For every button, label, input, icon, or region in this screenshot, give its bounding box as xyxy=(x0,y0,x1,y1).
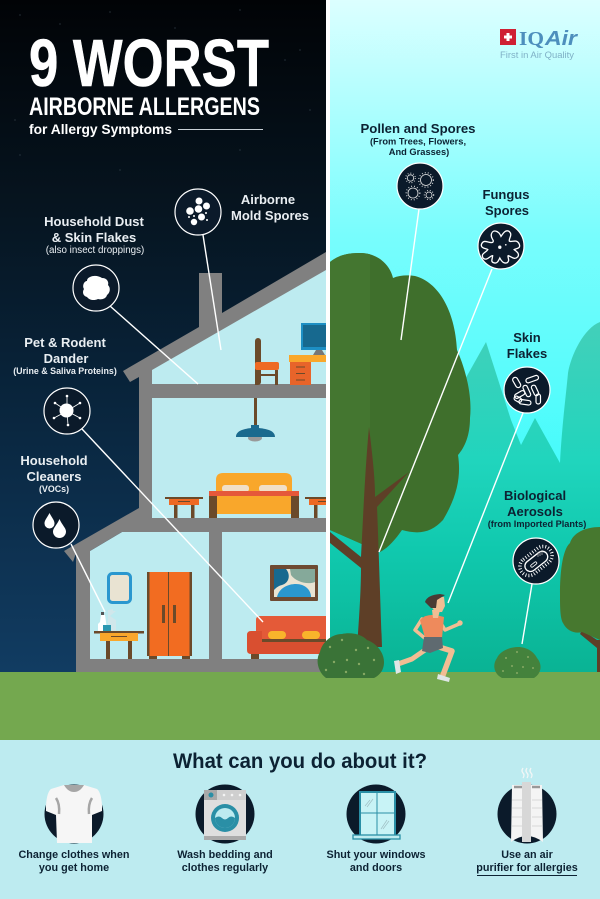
logo: IQAir: Air xyxy=(544,28,578,50)
action: air purifier: Use an air xyxy=(501,849,554,861)
label: household dust: Household Dust xyxy=(44,214,144,229)
icon: drops xyxy=(33,502,79,548)
right tree background xyxy=(560,527,600,672)
action: change clothes xyxy=(18,784,130,874)
action: change clothes: you get home xyxy=(39,862,109,874)
runner xyxy=(394,594,463,682)
furniture: wardrobe xyxy=(147,572,192,659)
furniture: side table with cleaners xyxy=(94,609,144,659)
label: biological aerosols: Aerosols xyxy=(507,504,563,519)
label: household cleaners: (VOCs) xyxy=(39,484,69,494)
title xyxy=(29,26,269,137)
leader lines xyxy=(71,209,532,644)
big tree xyxy=(330,253,470,647)
action: shut windows: and doors xyxy=(350,862,402,874)
label: pet and rodent dander: (Urine & Saliva Proteins) xyxy=(13,366,117,376)
furniture: sofa xyxy=(247,616,326,659)
label: airborne mold spores xyxy=(231,192,309,223)
label: fungus spores: Fungus xyxy=(483,187,529,202)
panel: outdoor day sky xyxy=(330,0,600,672)
furniture: painting xyxy=(270,565,318,601)
label: skin flakes xyxy=(507,330,547,361)
action: wash bedding: clothes regularly xyxy=(182,862,268,874)
label: pet and rodent dander: Dander xyxy=(44,351,88,366)
label: household cleaners: Cleaners xyxy=(27,469,81,484)
label: household cleaners: Household xyxy=(20,453,88,468)
title: AIRBORNE ALLERGENS xyxy=(29,93,260,121)
icon: dust xyxy=(73,265,119,311)
logo: IQAir: IQ xyxy=(519,28,544,50)
icon: pollen xyxy=(397,163,443,209)
label: biological aerosols: Biological xyxy=(504,488,566,503)
label: biological aerosols: (from Imported Plants) xyxy=(488,519,586,529)
label: biological aerosols xyxy=(488,488,586,529)
furniture: ceiling lamp xyxy=(236,398,275,442)
label: skin flakes: Skin xyxy=(513,330,541,345)
action: air purifier: purifier for allergies xyxy=(476,862,578,874)
label: pet and rodent dander: Pet & Rodent xyxy=(24,335,106,350)
action: air purifier xyxy=(476,768,578,876)
label: household dust xyxy=(44,214,144,256)
furniture: mirror xyxy=(108,574,130,602)
icon: dander xyxy=(44,388,90,434)
label: pollen and spores: Pollen and Spores xyxy=(360,121,476,136)
bush small xyxy=(494,647,541,678)
action: change clothes: Change clothes when xyxy=(18,849,130,861)
title: for Allergy Symptoms xyxy=(29,122,172,137)
furniture: chair xyxy=(255,338,279,385)
furniture: night tables xyxy=(165,497,326,518)
icon: mold spores xyxy=(175,189,221,235)
logo: IQAir: First in Air Quality xyxy=(500,50,574,61)
panel: what can you do xyxy=(0,740,600,899)
label: fungus spores xyxy=(483,187,529,218)
logo: IQAir xyxy=(500,28,578,61)
label: fungus spores: Spores xyxy=(485,203,529,218)
action: shut windows xyxy=(327,784,425,874)
ground xyxy=(0,672,600,740)
furniture: bed xyxy=(209,473,299,518)
bush large xyxy=(318,633,384,678)
label: skin flakes: Flakes xyxy=(507,346,547,361)
label: pet and rodent dander xyxy=(13,335,117,376)
icon: fungus xyxy=(478,223,524,269)
furniture: desk and monitor xyxy=(289,323,326,385)
label: household dust: (also insect droppings) xyxy=(46,245,144,256)
label: household cleaners xyxy=(20,453,88,494)
action: wash bedding: Wash bedding and xyxy=(177,849,273,861)
panel: indoor night sky xyxy=(0,0,326,672)
label: pollen and spores xyxy=(360,121,476,157)
action: shut windows: Shut your windows xyxy=(327,849,425,861)
label: pollen and spores: (From Trees, Flowers, xyxy=(370,136,466,146)
label: airborne mold spores: Mold Spores xyxy=(231,208,309,223)
action: wash bedding xyxy=(177,784,273,874)
label: airborne mold spores: Airborne xyxy=(241,192,295,207)
label: household dust: & Skin Flakes xyxy=(52,230,136,245)
title: 9 WORST xyxy=(29,26,269,101)
icon: skin flakes xyxy=(504,367,550,413)
label: pollen and spores: And Grasses) xyxy=(389,147,449,157)
heading: what can you do about it: What can you do about it? xyxy=(173,750,427,773)
house structure xyxy=(64,252,326,672)
icon: bio aerosols xyxy=(513,538,559,584)
stars xyxy=(14,9,311,171)
